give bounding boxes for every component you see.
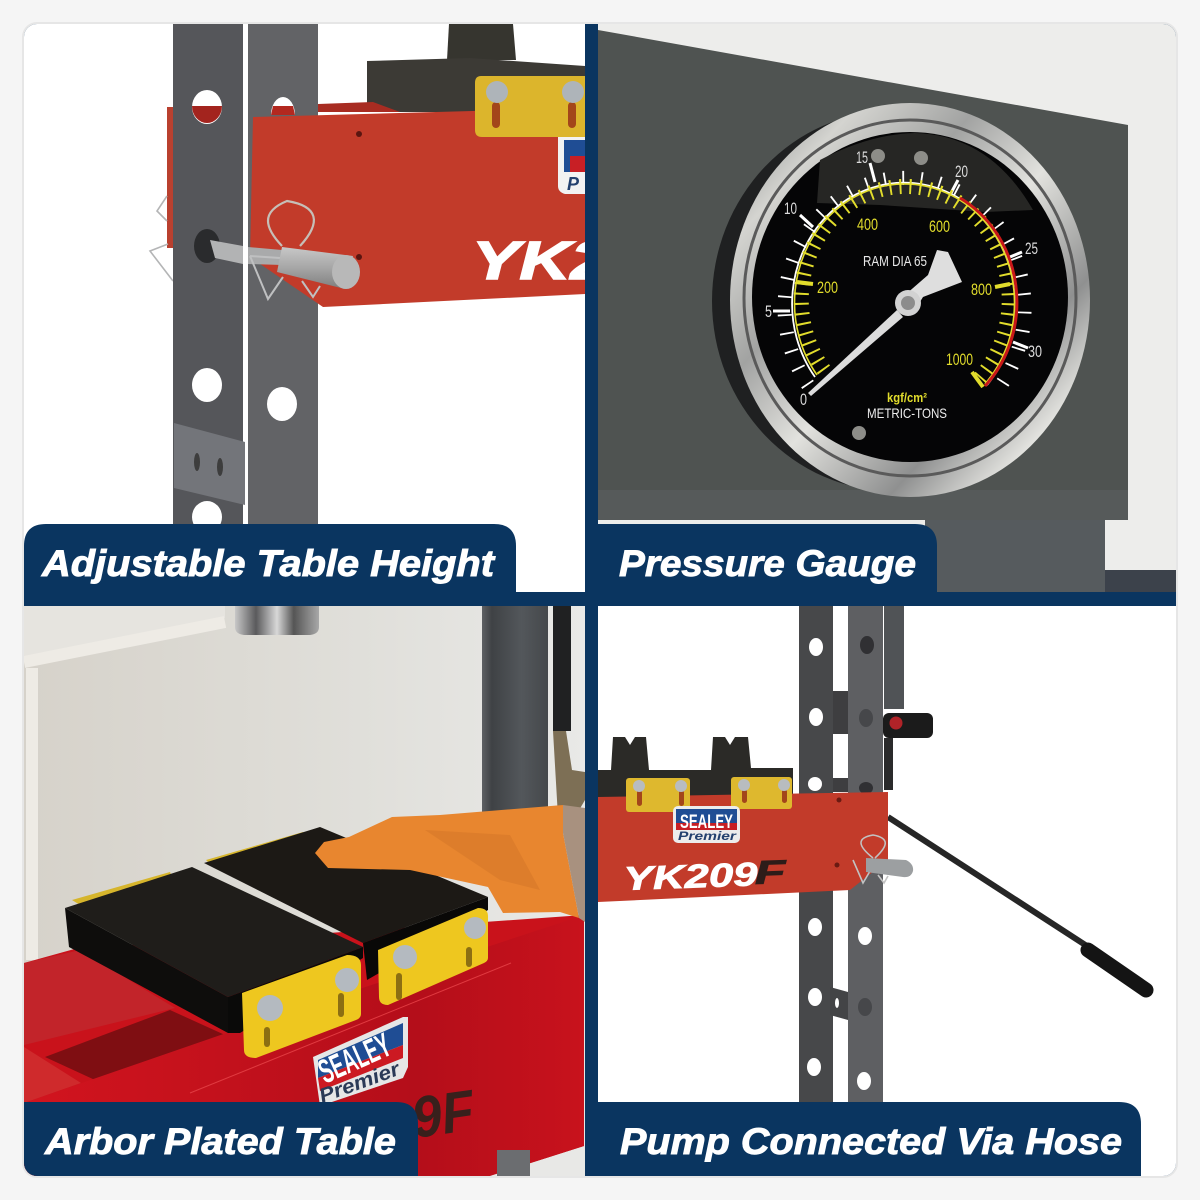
- left upright post: [173, 24, 243, 524]
- black plate left: [65, 867, 363, 1033]
- label: pressure gauge: [585, 524, 937, 592]
- gauge units: kgf/cm²: [887, 391, 927, 405]
- model name: [623, 853, 787, 897]
- model name: F: [754, 853, 787, 891]
- sealey logo: Premier: [678, 831, 737, 843]
- plate bolts: [633, 779, 790, 792]
- gauge units: [868, 392, 946, 418]
- glass reflection: [817, 133, 1033, 212]
- saddle blocks: [598, 737, 793, 797]
- gauge caption: RAM DIA 65: [863, 253, 927, 270]
- post holes: [192, 90, 297, 533]
- upper cross bracket: [825, 691, 849, 734]
- black plate right: [204, 827, 488, 980]
- rear red plate: [167, 107, 173, 248]
- table panel edge: [190, 963, 511, 1093]
- label: adjustable table height: Adjustable Table Height: [41, 543, 496, 584]
- ram: [235, 606, 319, 635]
- label: arbor plated table: Arbor Plated Table: [44, 1121, 396, 1162]
- orange glove: [315, 805, 579, 918]
- wall beneath table: [490, 1146, 585, 1176]
- gauge numbers outer: 20: [955, 162, 968, 181]
- lower column: [925, 520, 1105, 592]
- right upright post: [248, 24, 318, 524]
- label: arbor plated table: [24, 1102, 418, 1176]
- rear wire clip: [150, 196, 173, 281]
- white scale arc: [792, 183, 1016, 385]
- panel: pressure gauge: [598, 24, 1176, 592]
- yellow mounting plate: [475, 76, 585, 137]
- table holes: [834, 798, 842, 868]
- right upright: [848, 606, 883, 1106]
- sealey logo: [673, 806, 740, 843]
- gauge screws: [852, 149, 928, 440]
- yellow tick marks: [801, 186, 1009, 378]
- sealey premier logo: Premier: [316, 1058, 404, 1108]
- cylinder lower fitting: [884, 738, 893, 790]
- brick wall: [24, 606, 585, 1176]
- gauge numbers outer: 25: [1025, 239, 1038, 258]
- post bracket: [830, 987, 848, 1020]
- gauge numbers outer: 30: [1028, 342, 1042, 361]
- dark press block: [367, 58, 585, 112]
- model name: YK209: [623, 855, 759, 897]
- gauge numbers yellow: [817, 215, 992, 369]
- tray rail: [24, 1047, 81, 1103]
- hose fitting: [553, 731, 585, 817]
- lower rear bracket: [825, 778, 849, 792]
- panel: pump connected via hose: [598, 606, 1176, 1176]
- yellow plate left: [242, 955, 361, 1058]
- sealey premier logo: SEALEY: [313, 1026, 397, 1091]
- red scale arc: [960, 198, 1017, 386]
- lower bracket: [174, 423, 245, 505]
- tray interior: [45, 1010, 225, 1080]
- saddle block: [447, 24, 516, 60]
- gauge numbers outer: [765, 148, 1042, 409]
- red table: [598, 792, 888, 902]
- table model lettering: 9F: [408, 1078, 480, 1151]
- locking pin: [853, 835, 913, 883]
- wrist: [563, 805, 585, 922]
- gauge numbers outer: 10: [784, 199, 797, 218]
- yellow rear tabs: [72, 832, 306, 905]
- label: pressure gauge: Pressure Gauge: [619, 543, 916, 584]
- gauge numbers outer: 0: [800, 390, 807, 409]
- pump handle: [888, 817, 1146, 990]
- model text: YK2: [472, 231, 610, 291]
- gauge numbers outer: 15: [856, 148, 868, 167]
- yellow major ticks: [797, 282, 1010, 387]
- press housing: [598, 30, 1128, 520]
- yellow scale arc: [795, 184, 1015, 384]
- red table: [24, 915, 584, 1176]
- red table: [250, 108, 585, 307]
- gauge numbers yellow: 1000: [946, 350, 973, 369]
- table leg: [497, 1150, 530, 1176]
- yellow plates: [626, 777, 792, 812]
- label: pump connected via hose: [585, 1102, 1141, 1176]
- gauge numbers yellow: 600: [929, 217, 950, 236]
- panel: arbor plated table: [24, 606, 585, 1176]
- white tick marks: [785, 178, 1025, 392]
- pump knob: [883, 713, 933, 738]
- mortar lines: [24, 622, 225, 960]
- upright column: [482, 606, 548, 821]
- table bolt holes: [356, 131, 362, 260]
- gauge numbers yellow: 400: [857, 215, 878, 234]
- locking pin: [194, 201, 360, 299]
- panel: adjustable table height: [24, 24, 610, 592]
- table front face: [24, 915, 584, 1176]
- label: pump connected via hose: Pump Connected Via Hose: [620, 1121, 1122, 1162]
- red strip behind table: [318, 102, 400, 112]
- gauge numbers yellow: 200: [817, 278, 838, 297]
- silver bezel: [730, 103, 1090, 497]
- sealey logo fragment: [558, 137, 585, 194]
- yellow plate right: [378, 908, 488, 1005]
- left upright: [799, 606, 833, 1106]
- gauge numbers outer: 5: [765, 302, 772, 321]
- hydraulic cylinder: [884, 606, 904, 709]
- gauge units: METRIC-TONS: [867, 405, 947, 421]
- sealey logo: SEALEY: [680, 812, 733, 833]
- plate slots: [637, 789, 787, 806]
- tray inner wall: [24, 950, 175, 1045]
- label: adjustable table height: [24, 524, 516, 592]
- gauge case: [712, 121, 849, 486]
- sealey premier logo: [313, 1017, 408, 1108]
- sealey logo fragment: P: [567, 174, 580, 194]
- hose: [553, 606, 571, 731]
- gauge numbers yellow: 800: [971, 280, 992, 299]
- upper brick course: [24, 606, 225, 656]
- gauge face: [752, 132, 1068, 462]
- gauge needle: [808, 250, 962, 396]
- white major ticks: [773, 163, 1028, 348]
